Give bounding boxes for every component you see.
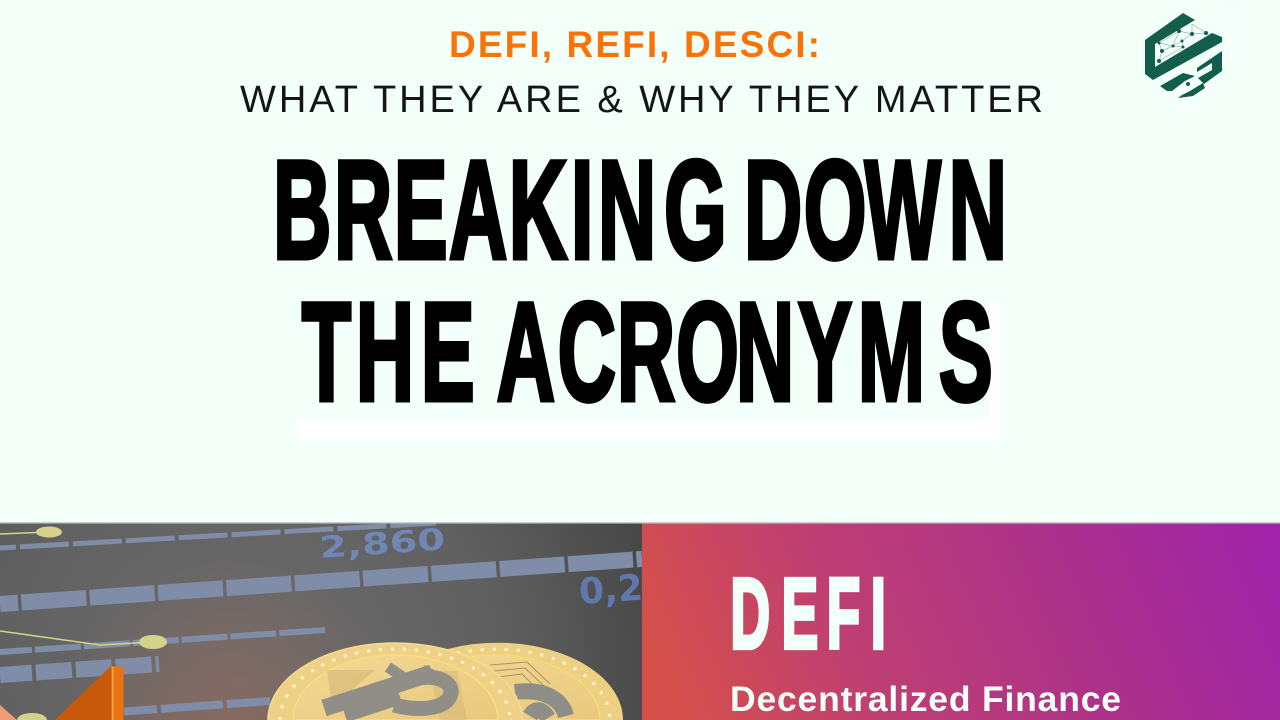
icon: logo <box>1145 13 1222 98</box>
white logo edge mark <box>1231 2 1233 65</box>
main heading: BREAKING DOWN <box>273 133 1007 289</box>
subtitle: WHAT THEY ARE & WHY THEY MATTER <box>240 79 1043 121</box>
front coin <box>268 643 522 720</box>
top edge line of lower panels <box>0 522 1280 524</box>
orange 3d bars <box>0 666 124 720</box>
card subtitle: Decentralized Finance <box>730 679 1121 719</box>
yellow line chart <box>0 526 167 720</box>
main heading <box>273 133 1007 431</box>
card title: DEFI <box>730 559 886 670</box>
chart value labels: 2,860 <box>318 522 446 566</box>
panel: DeFi gradient card <box>642 523 1280 720</box>
photo panel: bitcoin on a trading screen <box>0 522 644 720</box>
chart bars on the screen <box>0 523 642 712</box>
main heading: THE ACRONYMS <box>302 275 993 431</box>
photo panel: bitcoin on a trading screen: 0,2 <box>578 568 644 613</box>
back coin <box>448 642 623 720</box>
white strip behind heading <box>297 300 1000 440</box>
bitcoin coins <box>268 643 623 720</box>
eyebrow title: DeFi, ReFi, DeSci: DEFI, REFI, DESCI: <box>449 24 820 65</box>
